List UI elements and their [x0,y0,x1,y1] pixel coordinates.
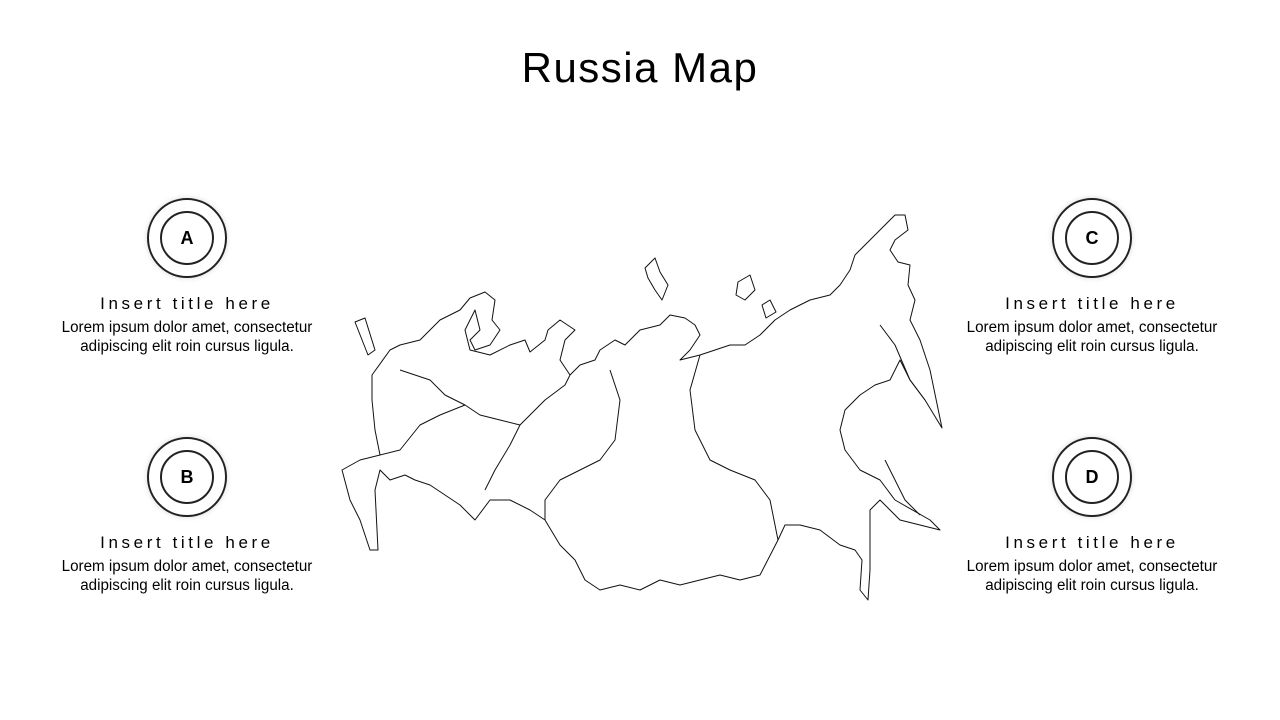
panel B: adipiscing elit roin cursus ligula. [80,577,294,594]
panel A [62,196,312,355]
panel A: Insert title here [100,294,274,313]
panel C: Lorem ipsum dolor amet, consectetur [967,319,1217,336]
panel C: C [1086,228,1098,248]
panel B: Insert title here [100,533,274,552]
title: Russia Map [522,44,758,91]
panel C [967,196,1218,355]
panel A: A [180,228,194,248]
panel B: B [180,467,194,487]
panel A: Lorem ipsum dolor amet, consectetur [62,319,312,336]
panel A: adipiscing elit roin cursus ligula. [80,338,294,355]
panel D: Insert title here [1005,533,1179,552]
panel C: Insert title here [1005,294,1179,313]
panel C: adipiscing elit roin cursus ligula. [985,338,1199,355]
panel D: Lorem ipsum dolor amet, consectetur [967,558,1217,575]
panel D: D [1086,467,1098,487]
panel D: adipiscing elit roin cursus ligula. [985,577,1199,594]
panel B: Lorem ipsum dolor amet, consectetur [62,558,312,575]
panel B [62,435,312,594]
panel D [967,435,1218,594]
